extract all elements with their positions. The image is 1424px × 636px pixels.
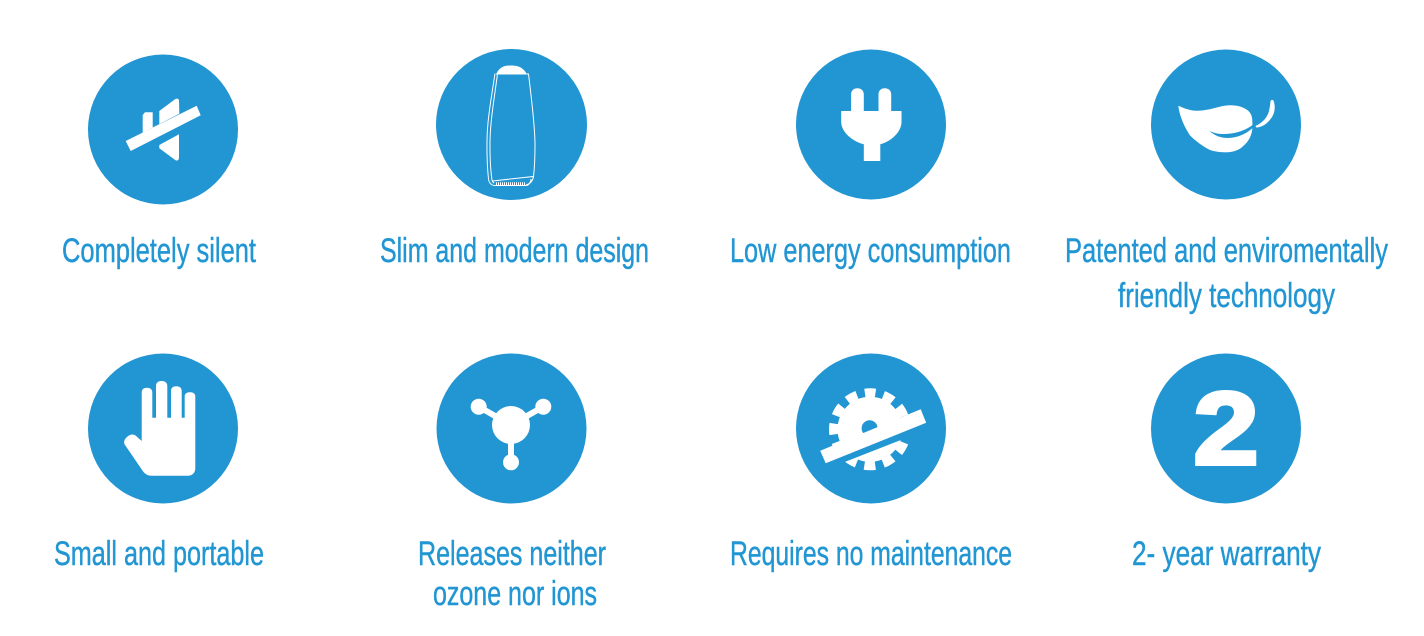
label: completely silent: Completely silent <box>62 232 256 270</box>
label: low energy consumption: Low energy consumption <box>730 232 1011 270</box>
label: 2-year warranty: 2- year warranty <box>1132 535 1321 573</box>
label: slim and modern design: Slim and modern design <box>380 232 649 270</box>
label: releases neither ozone nor ions: Releases neither <box>418 535 606 573</box>
icon: slim air purifier <box>436 49 587 200</box>
icon: number 2: 2 <box>1193 371 1259 486</box>
icon: muted speaker <box>88 54 238 204</box>
label: releases neither ozone nor ions: ozone nor ions <box>433 575 597 613</box>
panel: requires no maintenance <box>730 354 1012 573</box>
label: patented and environmentally friendly technology: friendly technology <box>1118 277 1335 315</box>
panel: slim and modern design <box>380 49 649 270</box>
icon: crossed-out gear <box>796 354 946 504</box>
panel: completely silent <box>62 54 256 270</box>
panel: releases neither ozone nor ions <box>418 354 606 613</box>
icon: molecule <box>436 354 586 504</box>
panel: small and portable <box>54 354 264 573</box>
label: releases neither ozone nor ions <box>418 535 606 613</box>
panel: patented and environmentally friendly technology <box>1065 50 1388 315</box>
panel: 2-year warranty <box>1132 354 1321 573</box>
label: requires no maintenance: Requires no maintenance <box>730 535 1012 573</box>
icon: number 2 <box>1151 354 1301 504</box>
icon: power plug <box>796 50 946 200</box>
icon: hand <box>88 354 238 504</box>
label: patented and environmentally friendly technology <box>1065 232 1388 315</box>
label: small and portable: Small and portable <box>54 535 264 573</box>
icon: leaf <box>1151 50 1301 200</box>
panel: low energy consumption <box>730 50 1011 270</box>
